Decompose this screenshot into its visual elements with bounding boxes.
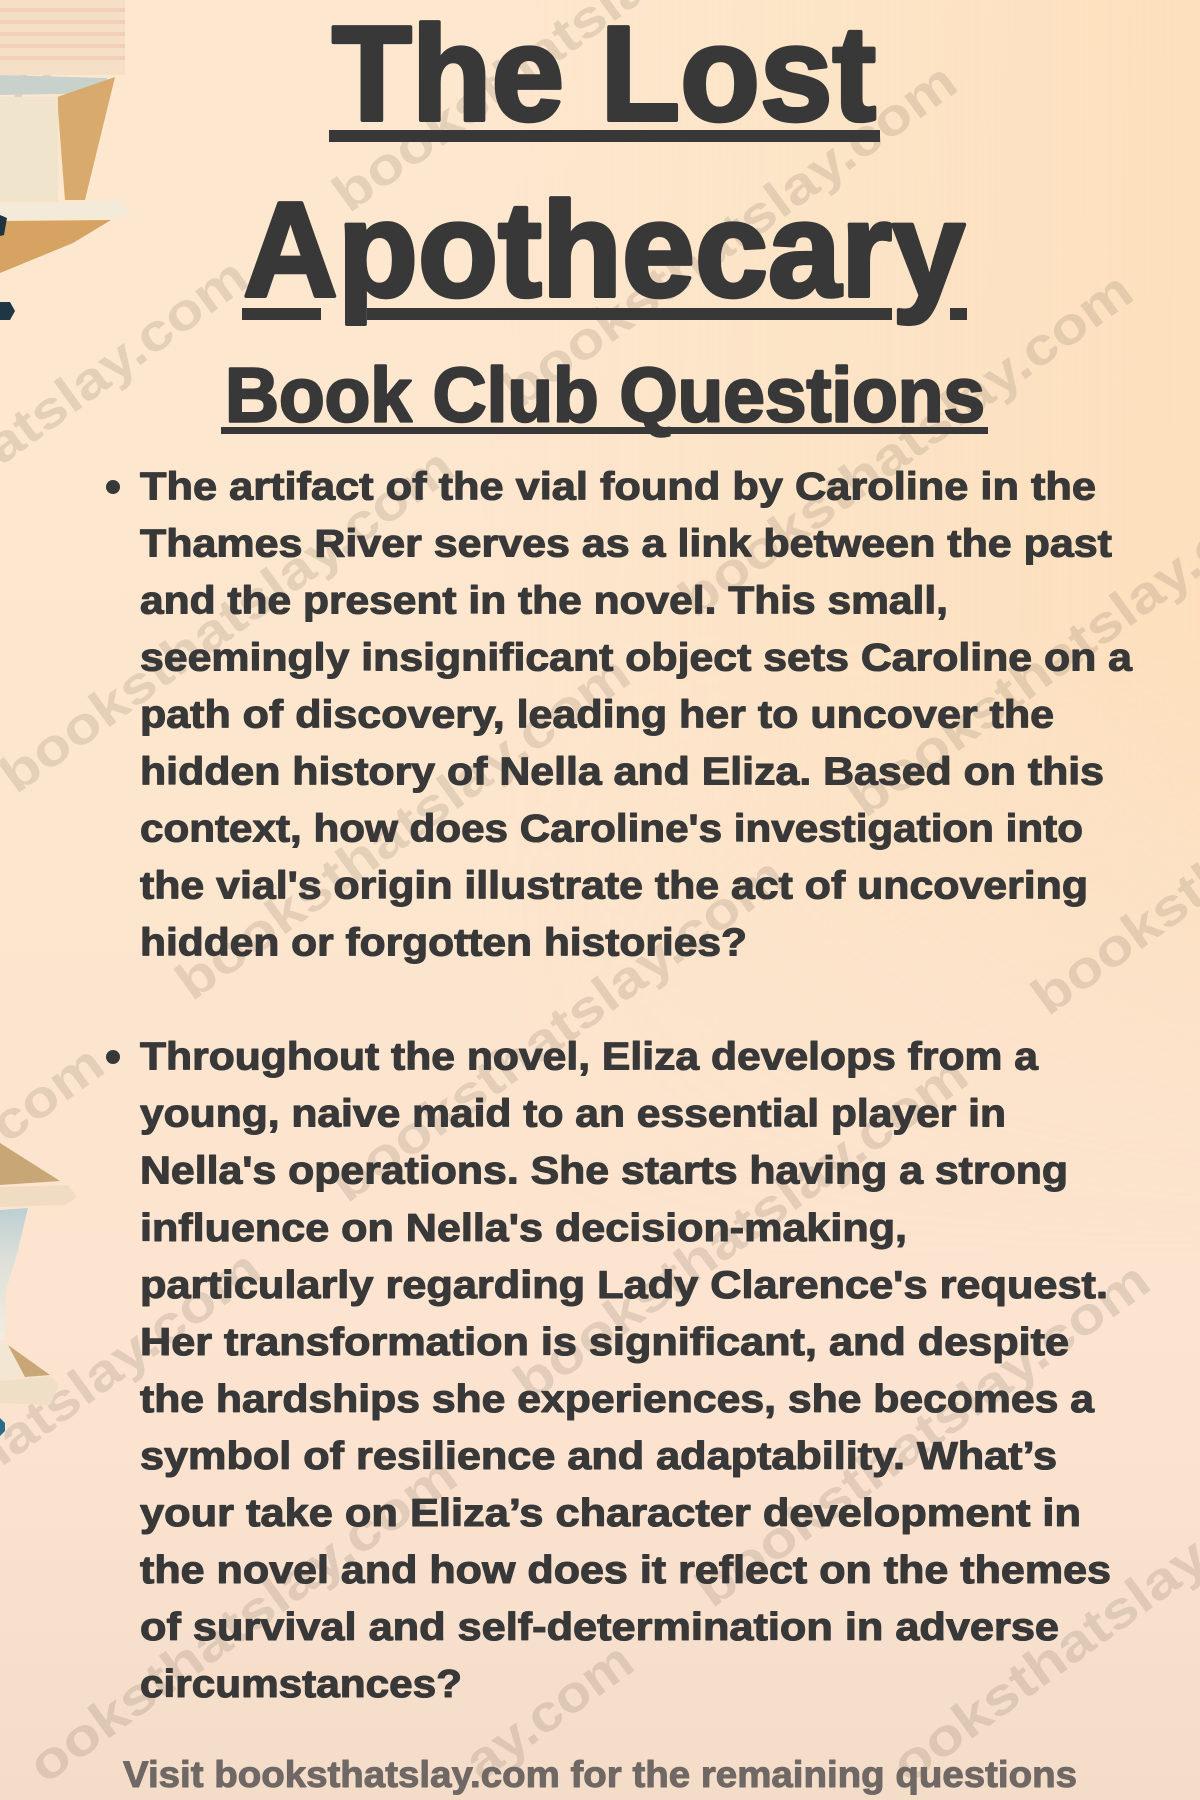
question 1: context, how does Caroline's investigation into [140, 808, 1083, 851]
question 1: The artifact of the vial found by Caroline in the [140, 466, 1096, 508]
question 1: seemingly insignificant object sets Caroline on a [140, 637, 1132, 680]
title: Apothecary [243, 174, 965, 325]
illustration: bottom book stack [0, 1143, 77, 1436]
title [242, 0, 967, 325]
watermarks: booksthatslay.com [668, 261, 1144, 629]
question 2: your take on Eliza’s character development in [140, 1492, 1081, 1535]
illustration: top book stack [0, 0, 130, 320]
watermarks: booksthatslay.com [503, 1045, 979, 1413]
question 2: the hardships she experiences, she becomes a [140, 1378, 1094, 1421]
background [1055, 0, 1200, 757]
question 2: symbol of resilience and adaptability. What’s [140, 1435, 1057, 1478]
watermarks: booksthatslay.com [0, 437, 465, 805]
watermarks: booksthatslay.com [165, 644, 641, 1012]
watermarks: booksthatslay.com [492, 52, 968, 420]
question 2: young, naive maid to an essential player in [140, 1093, 1006, 1136]
footer call to action: Visit booksthatslay.com for the remaining questions [123, 1754, 1077, 1795]
subtitle: Book Club Questions [225, 352, 985, 438]
watermarks: booksthatslay.com [685, 1251, 1161, 1619]
question 2: Throughout the novel, Eliza develops from a [140, 1036, 1038, 1079]
question 1: hidden or forgotten histories? [140, 922, 747, 965]
question 1: Thames River serves as a link between the past [140, 522, 1112, 566]
question 2: particularly regarding Lady Clarence's request. [140, 1264, 1108, 1307]
question 2: the novel and how does it reflect on the themes [140, 1549, 1111, 1592]
question 2: of survival and self-determination in adverse [140, 1606, 1059, 1649]
question 2 [106, 1036, 1111, 1706]
question 1 [106, 466, 1132, 965]
watermarks: ay.com [454, 1631, 644, 1792]
question 2: Nella's operations. She starts having a strong [140, 1150, 1068, 1193]
watermarks: booksthatslay.com [320, 846, 796, 1214]
question 1: path of discovery, leading her to uncover the [140, 694, 1054, 737]
watermarks: ooksthatslay.com [18, 1446, 468, 1795]
title: The Lost [332, 0, 876, 149]
question 2: influence on Nella's decision-making, [140, 1207, 907, 1250]
question 1: hidden history of Nella and Eliza. Based on this [140, 751, 1104, 794]
question 2: Her transformation is significant, and despite [140, 1321, 1069, 1364]
question 2: circumstances? [140, 1663, 462, 1706]
question 1: and the present in the novel. This small, [140, 580, 948, 622]
question 1: the vial's origin illustrate the act of uncovering [140, 865, 1088, 908]
